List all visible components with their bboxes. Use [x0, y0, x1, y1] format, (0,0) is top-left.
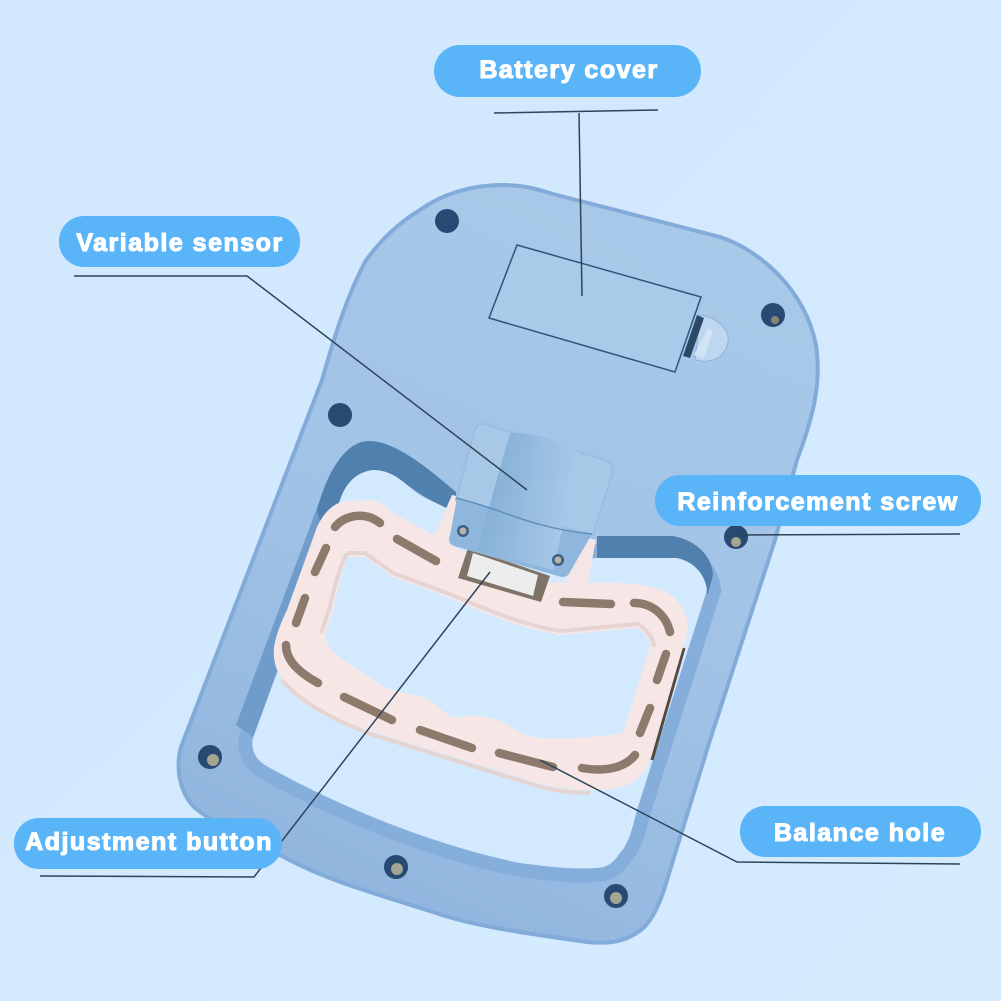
- window opening: [252, 470, 707, 869]
- label: balance hole: [740, 806, 981, 857]
- grip frame: [274, 500, 688, 790]
- grip edge shadow: [652, 648, 684, 760]
- leader: balance hole: [540, 760, 960, 864]
- handle: [274, 495, 688, 793]
- adjustment knob: [458, 548, 550, 602]
- left wall shade: [236, 505, 340, 738]
- label: reinforcement screw: [655, 475, 981, 526]
- grip inner shading: [282, 553, 654, 793]
- plate crease: [456, 498, 592, 534]
- cover tab: [695, 315, 728, 361]
- window inner wall: [252, 470, 707, 869]
- lower plate: [449, 498, 592, 577]
- label: balance hole: Balance hole: [774, 819, 946, 847]
- cover outline: [489, 245, 701, 372]
- device body: [179, 185, 818, 943]
- plate screws: [457, 525, 564, 566]
- label: reinforcement screw: Reinforcement screw: [677, 488, 959, 516]
- leader: variable sensor: [74, 276, 527, 490]
- label: adjustment button: Adjustment button: [25, 828, 273, 856]
- label: battery cover: [434, 45, 701, 97]
- cylinder: [477, 433, 580, 570]
- upper translucent plate: [456, 424, 613, 535]
- window dark upper band: [317, 441, 713, 594]
- sensor housing: [449, 424, 613, 577]
- body shell: [179, 185, 818, 943]
- balance slots: [286, 516, 670, 769]
- leader: reinforcement screw: [740, 534, 960, 535]
- battery cover: [489, 245, 728, 372]
- label: adjustment button: [14, 818, 282, 869]
- handle stems: [430, 495, 596, 586]
- label: battery cover: Battery cover: [479, 56, 659, 84]
- label: variable sensor: [59, 216, 300, 267]
- label: variable sensor: Variable sensor: [76, 229, 284, 257]
- body screws: [198, 209, 785, 908]
- leader: adjustment button: [40, 572, 490, 877]
- leader: battery cover: [494, 110, 658, 296]
